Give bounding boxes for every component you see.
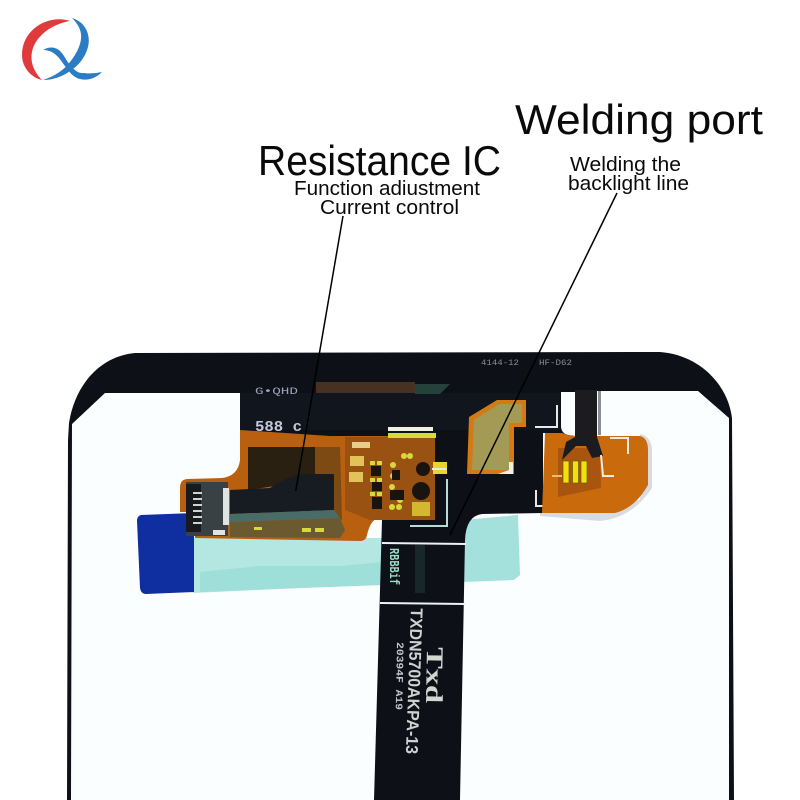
black frame (67, 352, 734, 800)
flex markings: 20394F A19 (392, 642, 404, 710)
leader line: Welding port (450, 193, 617, 535)
solder lines (563, 461, 587, 483)
text: Welding the backlight line (568, 154, 689, 195)
green code on stem: RBBBif (385, 548, 401, 585)
heading: Welding port: Welding port (515, 96, 763, 143)
solder pads (254, 433, 447, 532)
text: Welding the backlight line: backlight line (568, 173, 689, 195)
printed code: top bezel right: HF-D62 (539, 358, 572, 368)
text: Function adiustment, Current control (294, 178, 480, 219)
flex markings: Txd (420, 647, 447, 704)
gold welding pad (467, 400, 526, 474)
shadow of right flex (540, 434, 652, 521)
display module (67, 352, 734, 800)
printed number on frame: 588 c (255, 419, 302, 436)
text: Welding the backlight line: Welding the (570, 154, 681, 176)
flex markings (392, 608, 447, 754)
printed code on frame: G•QHD (255, 387, 298, 398)
IC chip under tape (248, 447, 315, 490)
white L-marks (410, 405, 557, 526)
flex markings: TXDN5700AKPA-13 (402, 608, 426, 754)
connector (186, 482, 229, 536)
heading: Resistance IC: Resistance IC (258, 137, 501, 184)
black tape (230, 474, 345, 538)
printed code: top bezel: 4144-12 (481, 358, 519, 368)
flex stem dividers (380, 543, 466, 604)
welding flex, right (542, 390, 648, 513)
orange flex: main board (180, 430, 435, 541)
logo (22, 18, 102, 80)
leader line: Resistance IC (296, 216, 343, 491)
teal protective film (193, 515, 520, 593)
white print above board (388, 427, 433, 431)
text: Function adiustment, Current control: Current control (320, 197, 459, 219)
blue tab (137, 513, 194, 594)
dark bezel band (240, 393, 560, 430)
white cutout beside cable (561, 392, 575, 436)
text: Function adiustment, Current control: Function adiustment (294, 178, 480, 200)
